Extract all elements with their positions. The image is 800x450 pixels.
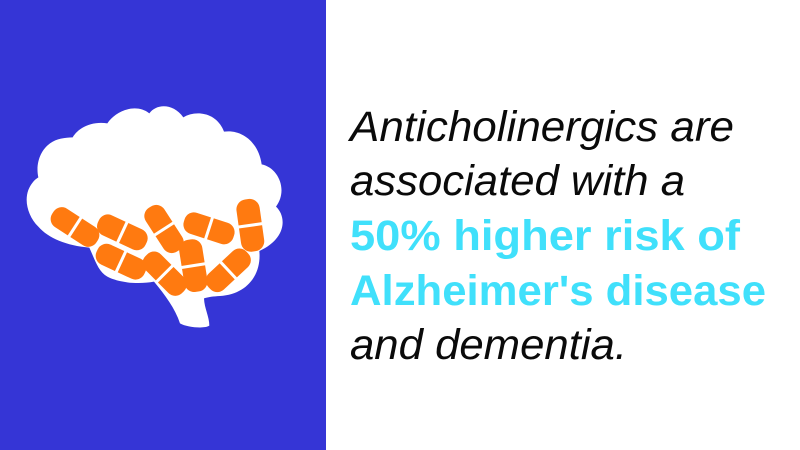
pill 2 xyxy=(94,211,151,254)
line 1: Anticholinergics are xyxy=(347,103,734,151)
panel: blue background xyxy=(0,0,326,450)
line 2: associated with a xyxy=(350,157,685,205)
text block: headline statement xyxy=(347,103,766,369)
pill 1 xyxy=(47,203,103,251)
pill 9 xyxy=(202,244,255,296)
line 5: and dementia. xyxy=(350,321,627,369)
pill 5 xyxy=(235,198,266,253)
pill 4 xyxy=(181,210,237,247)
pill 8 xyxy=(177,238,209,294)
pill 3 xyxy=(140,201,188,257)
pill 7 xyxy=(138,247,191,300)
line 4: highlighted: Alzheimer's disease xyxy=(350,267,766,315)
pill 6 xyxy=(92,240,150,283)
line 3: highlighted: 50% higher risk of xyxy=(350,212,741,260)
icon: brain filled with pills xyxy=(27,106,283,327)
brain silhouette xyxy=(27,106,283,327)
